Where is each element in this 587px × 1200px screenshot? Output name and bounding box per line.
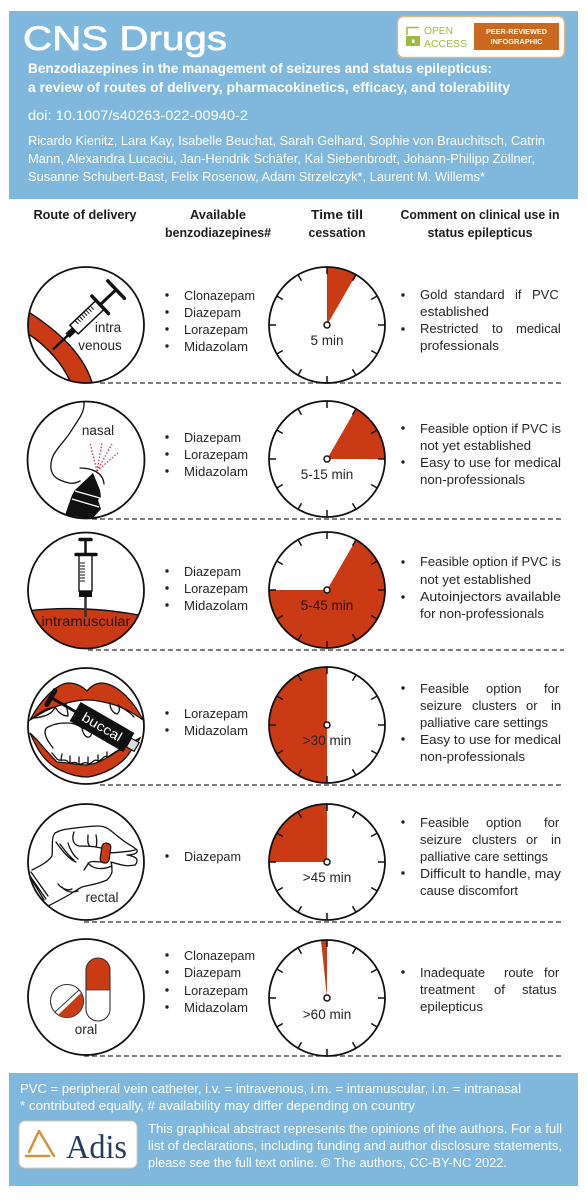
drug list: Diazepam xyxy=(184,430,241,445)
row: nasal xyxy=(28,401,561,519)
comment xyxy=(401,815,562,898)
drug list: Midazolam xyxy=(184,598,248,613)
article title: a review of routes of delivery, pharmacokinetics, efficacy, and tolerability xyxy=(28,79,510,95)
comment xyxy=(401,965,560,1014)
comment: for xyxy=(544,815,560,830)
disclaimer: please see the full text online. © The authors, CC-BY-NC 2022. xyxy=(148,1155,507,1170)
comment: Restricted xyxy=(420,321,479,336)
doi: doi: 10.1007/s40263-022-00940-2 xyxy=(28,108,248,123)
comment: treatment xyxy=(420,982,475,997)
icon: hand holding suppository xyxy=(28,804,144,920)
comment: status xyxy=(522,982,557,997)
disclaimer: This graphical abstract represents the opinions of the authors. For a full xyxy=(148,1121,562,1136)
comment xyxy=(401,421,561,487)
drug list: Diazepam xyxy=(184,564,241,579)
drug list xyxy=(165,288,255,354)
authors: Susanne Schubert-Bast, Felix Rosenow, Adam Strzelczyk*, Laurent M. Willems* xyxy=(28,169,485,184)
drug list: Lorazepam xyxy=(184,983,248,998)
Adis logo: Adis xyxy=(66,1129,127,1166)
comment: clusters xyxy=(472,698,517,713)
drug list xyxy=(165,564,248,613)
drug list: Lorazepam xyxy=(184,706,248,721)
comment: Feasible xyxy=(420,815,469,830)
drug list: Midazolam xyxy=(184,1000,248,1015)
comment: established xyxy=(420,304,489,319)
drug list: Lorazepam xyxy=(184,447,248,462)
comment: in xyxy=(551,698,561,713)
drug list: Midazolam xyxy=(184,723,248,738)
clock: >60 min: >60 min xyxy=(303,1007,351,1022)
column headings: Route of delivery xyxy=(34,207,137,222)
drug list: Diazepam xyxy=(184,965,241,980)
comment: seizure xyxy=(420,698,462,713)
comment: Gold xyxy=(420,287,447,302)
drug list xyxy=(165,948,255,1015)
clock: 5 min: 5 min xyxy=(310,333,344,348)
column headings: Available xyxy=(190,207,246,222)
row: rectal xyxy=(28,804,562,920)
authors xyxy=(28,133,545,184)
drug list: Lorazepam xyxy=(184,581,248,596)
clock: >45 min: >45 min xyxy=(303,870,351,885)
clock: >30 min: >30 min xyxy=(303,733,351,748)
column headings: cessation xyxy=(308,225,366,240)
comment: to xyxy=(492,321,503,336)
drug list: Lorazepam xyxy=(184,322,248,337)
column headings: Time till xyxy=(311,207,363,222)
comment: clusters xyxy=(472,832,517,847)
column headings xyxy=(34,207,560,240)
Adis logo xyxy=(19,1121,137,1168)
clock: 5 min xyxy=(269,267,385,383)
header panel xyxy=(9,11,578,199)
column headings: benzodiazepines# xyxy=(165,225,272,240)
drug list: Midazolam xyxy=(184,339,248,354)
comment: not yet established xyxy=(420,572,531,587)
icon: nasal spray: nasal xyxy=(82,423,114,438)
abbreviations: PVC = peripheral vein catheter, i.v. = intravenous, i.m. = intramuscular, i.n. = intranasal xyxy=(20,1081,521,1096)
authors: Ricardo Kienitz, Lara Kay, Isabelle Beuchat, Sarah Gelhard, Sophie von Brauchitsch, Catrin xyxy=(28,133,545,148)
article title: Benzodiazepines in the management of seizures and status epilepticus: xyxy=(28,60,492,76)
comment: standard xyxy=(454,287,505,302)
clock: 5-45 min: 5-45 min xyxy=(301,598,353,613)
clock: 5-45 min xyxy=(269,532,385,648)
comment: medical xyxy=(516,321,561,336)
comment xyxy=(401,287,561,353)
drug list: Diazepam xyxy=(184,305,241,320)
comment: option xyxy=(486,815,521,830)
comment: for xyxy=(544,681,560,696)
comment: Easy to use for medical xyxy=(420,732,561,747)
clock: >60 min xyxy=(269,940,385,1056)
comment: Autoinjectors available xyxy=(420,589,561,604)
column headings: Comment on clinical use in xyxy=(400,207,560,222)
comment: non-professionals xyxy=(420,749,526,764)
comment: palliative care settings xyxy=(420,715,548,730)
abbreviations: * contributed equally, # availability may differ depending on country xyxy=(20,1098,416,1113)
comment: Difficult to handle, may xyxy=(420,866,562,881)
clock: >45 min xyxy=(269,804,385,920)
comment: or xyxy=(526,832,538,847)
open access and peer reviewed badge xyxy=(398,16,564,58)
clock: 5-15 min: 5-15 min xyxy=(301,467,353,482)
comment: of xyxy=(494,982,505,997)
row: buccal xyxy=(28,667,561,784)
comment: for non-professionals xyxy=(420,606,545,621)
drug list: Midazolam xyxy=(184,464,248,479)
comment: route xyxy=(504,965,534,980)
comment xyxy=(401,681,561,764)
icon: intravenous syringe in vein xyxy=(24,267,144,386)
icon: buccal syringe in mouth: buccal xyxy=(79,710,125,744)
icon: tablet and capsule xyxy=(28,939,144,1055)
open access and peer reviewed badge: INFOGRAPHIC xyxy=(490,39,542,46)
icon: intramuscular syringe xyxy=(27,532,145,650)
icon: hand holding suppository: rectal xyxy=(85,890,119,905)
open access and peer reviewed badge: PEER-REVIEWED xyxy=(486,29,547,36)
article title xyxy=(28,60,510,95)
comment xyxy=(401,554,561,621)
comment: for xyxy=(544,965,560,980)
icon: intravenous syringe in vein: intra xyxy=(95,320,122,335)
comment: Inadequate xyxy=(420,965,485,980)
drug list xyxy=(165,430,248,479)
abbreviations xyxy=(20,1081,521,1113)
comment: Feasible xyxy=(420,681,469,696)
clock: 5-15 min xyxy=(269,401,385,517)
drug list: Diazepam xyxy=(184,849,241,864)
comment: option xyxy=(486,681,521,696)
comment: non-professionals xyxy=(420,472,526,487)
row: intravenous xyxy=(24,267,561,386)
comment: if xyxy=(515,287,522,302)
drug list xyxy=(165,706,248,738)
icon: tablet and capsule: oral xyxy=(75,1022,97,1037)
icon: nasal spray xyxy=(28,402,144,519)
comment: PVC xyxy=(532,287,559,302)
journal title: CNS Drugs xyxy=(23,20,227,58)
row: oral xyxy=(28,939,560,1056)
comment: palliative care settings xyxy=(420,849,548,864)
icon: intravenous syringe in vein: venous xyxy=(78,338,122,353)
comment: professionals xyxy=(420,338,500,353)
comment: not yet established xyxy=(420,438,531,453)
disclaimer xyxy=(148,1121,562,1170)
comment: Feasible option if PVC is xyxy=(420,554,561,569)
comment: epilepticus xyxy=(420,999,484,1014)
open access and peer reviewed badge: OPEN xyxy=(424,25,453,37)
authors: Mann, Alexandra Lucaciu, Jan-Hendrik Schäfer, Kai Siebenbrodt, Johann-Philipp Zöllner, xyxy=(28,151,535,166)
footer panel xyxy=(9,1073,578,1186)
comment: cause discomfort xyxy=(420,883,518,898)
comment: Easy to use for medical xyxy=(420,455,561,470)
icon: intramuscular syringe: intramuscular xyxy=(42,613,131,629)
icon: buccal syringe in mouth xyxy=(28,668,144,784)
drug list: Clonazepam xyxy=(184,288,255,303)
comment: seizure xyxy=(420,832,462,847)
column headings: status epilepticus xyxy=(428,225,532,240)
comment: in xyxy=(551,832,561,847)
disclaimer: list of declarations, including funding and author disclosure statements, xyxy=(148,1138,562,1153)
clock: >30 min xyxy=(269,667,385,783)
comment: Feasible option if PVC is xyxy=(420,421,561,436)
row: intramuscular xyxy=(20,532,561,660)
comment: or xyxy=(526,698,538,713)
open access and peer reviewed badge: ACCESS xyxy=(424,38,467,50)
drug list: Clonazepam xyxy=(184,948,255,963)
